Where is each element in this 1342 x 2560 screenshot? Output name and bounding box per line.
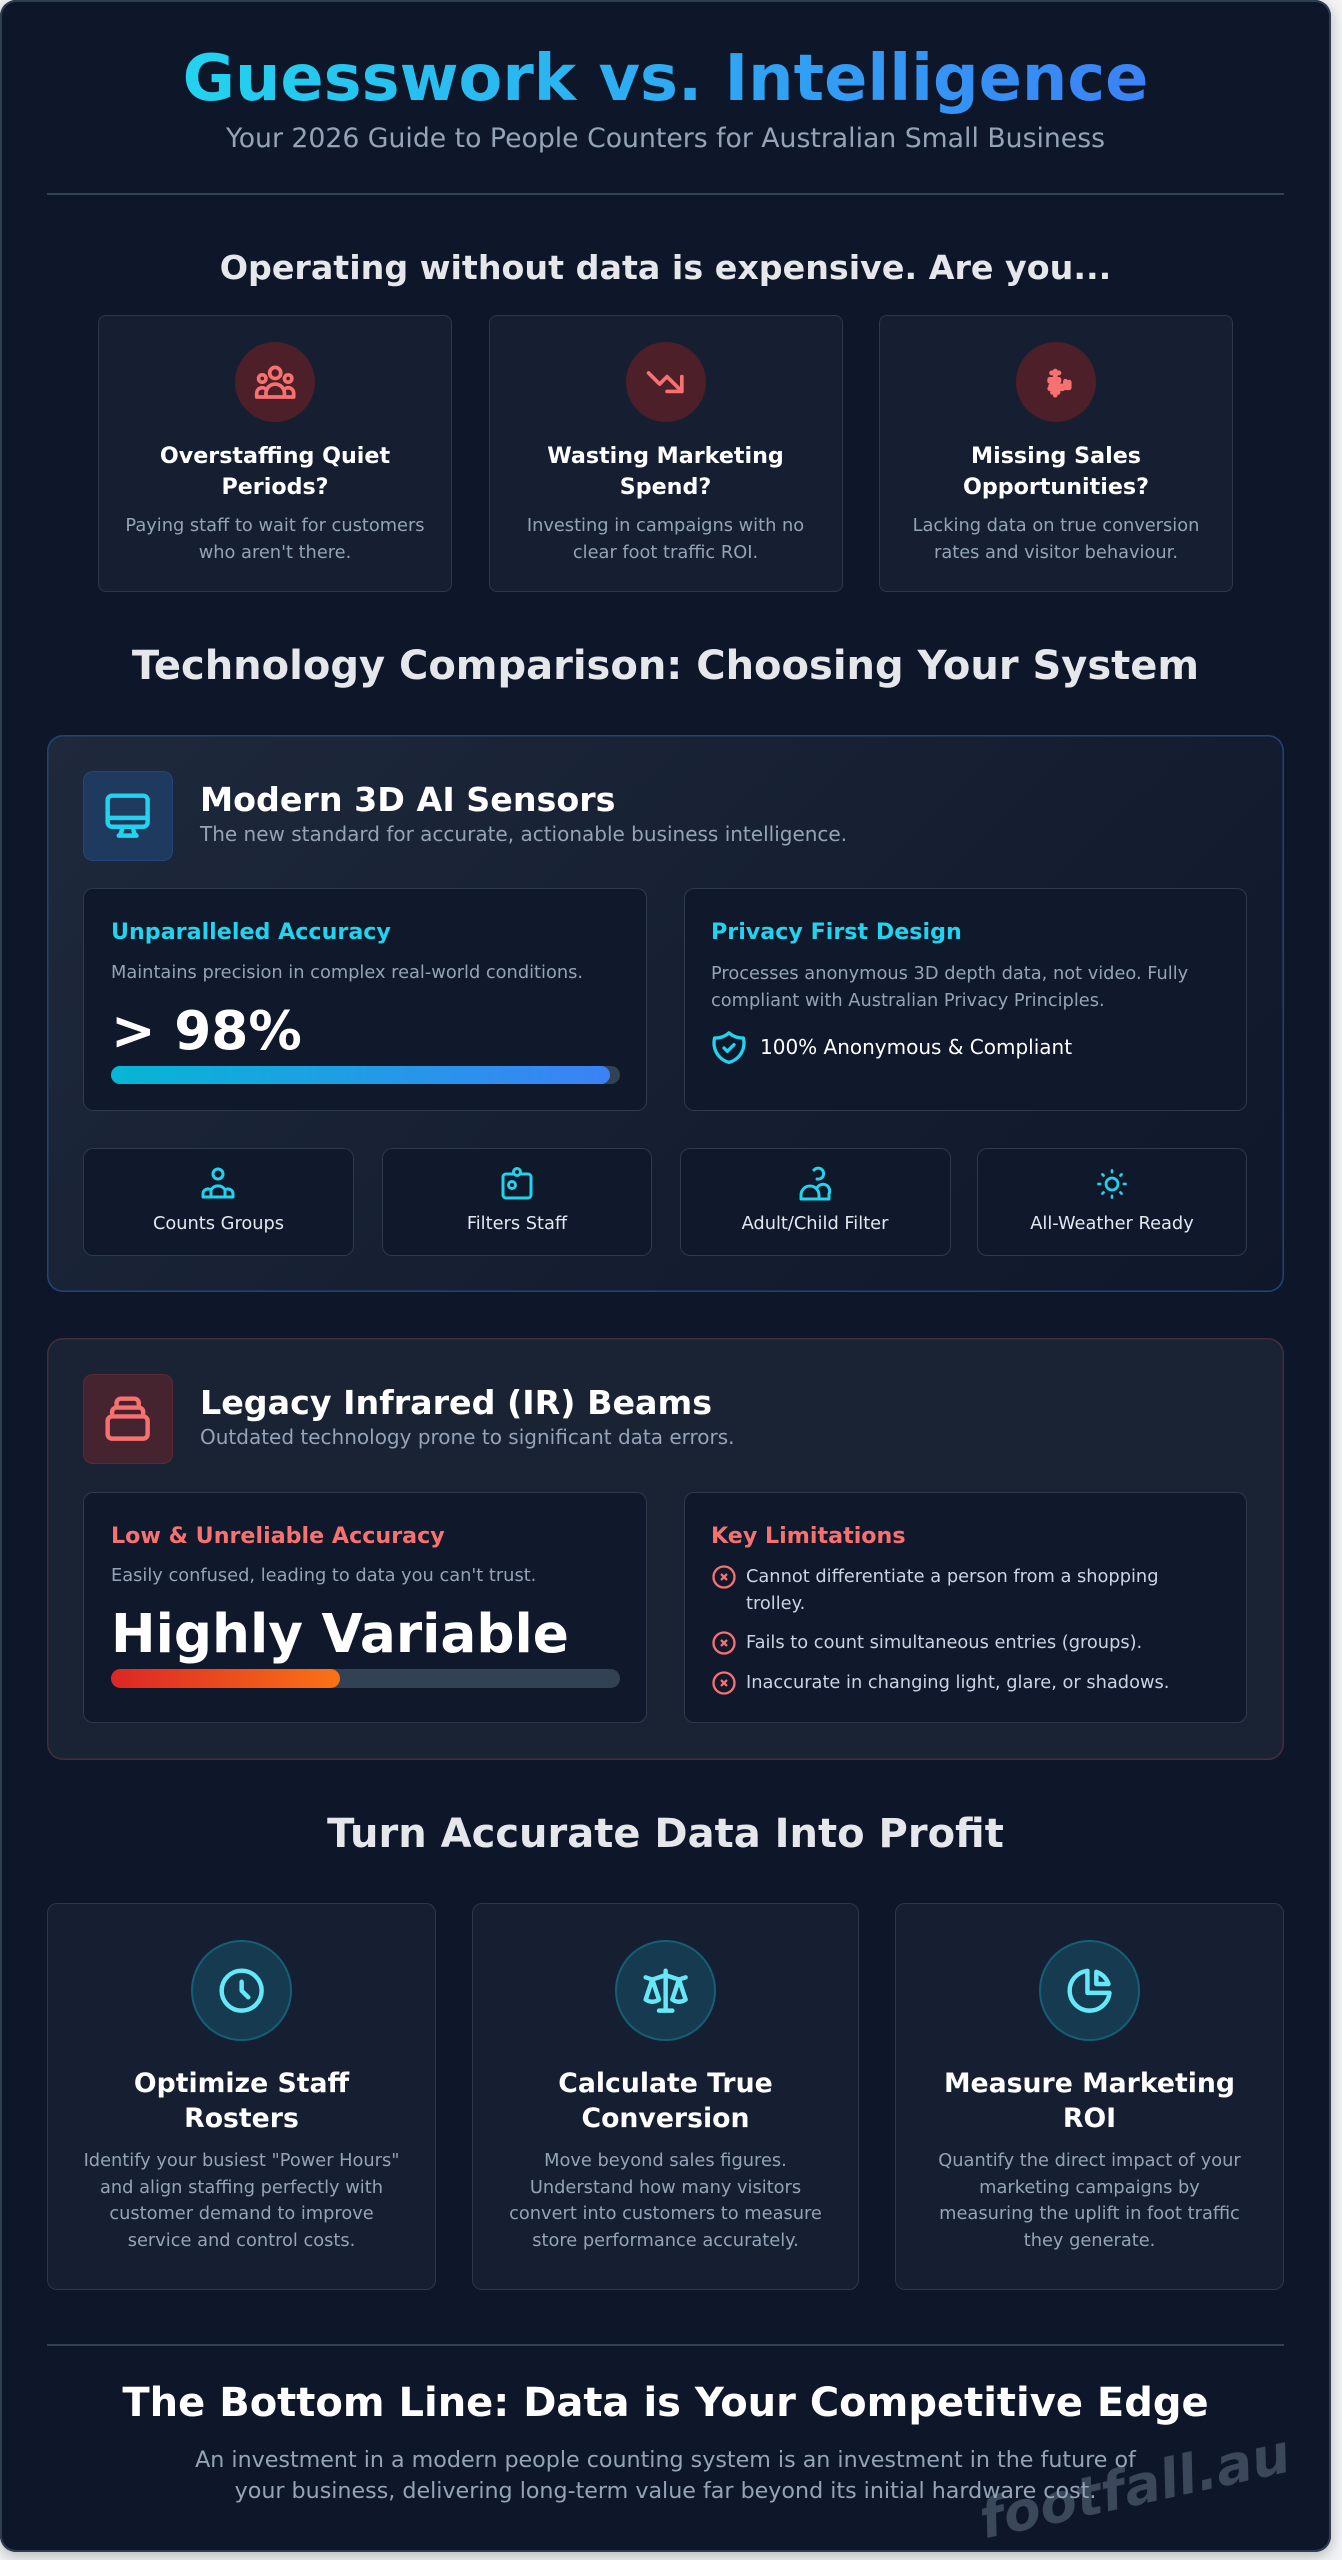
card text: they generate. [1024,2230,1155,2251]
card: privacy [684,888,1247,1111]
limitation 1: Cannot differentiate a person from a shopping [746,1566,1158,1587]
card text: Investing in campaigns with no [527,515,804,536]
card heading: Periods? [221,474,329,500]
card text: and align staffing perfectly with [100,2177,383,2198]
heading: Unparalleled Accuracy [111,919,391,945]
feature: all weather [977,1148,1247,1256]
card text: measuring the uplift in foot traffic [939,2203,1240,2224]
label: All-Weather Ready [1030,1213,1194,1234]
card text [938,2150,1241,2251]
panel subtitle: Outdated technology prone to significant data errors. [200,1425,735,1449]
icon: scale [615,1940,716,2041]
card heading [944,2068,1235,2134]
card heading: Calculate True [558,2068,773,2099]
title: Guesswork vs. Intelligence [183,42,1148,116]
card text: Identify your busiest "Power Hours" [84,2150,399,2171]
footer text: your business, delivering long-term value far beyond its initial hardware cost. [235,2478,1096,2504]
card: measure ROI [895,1903,1284,2290]
card: low accuracy [83,1492,647,1723]
limitation 1: trolley. [746,1593,805,1614]
panel subtitle: The new standard for accurate, actionable business intelligence. [200,822,847,846]
icon: pie chart [1039,1940,1140,2041]
panel: modern 3D AI sensors [47,735,1284,1292]
card text: Lacking data on true conversion [913,515,1199,536]
feature: filters staff [382,1148,652,1256]
label: Counts Groups [153,1213,284,1234]
icon: monitor [83,771,173,861]
panel title: Legacy Infrared (IR) Beams [200,1383,712,1422]
stat: Highly Variable [111,1603,569,1665]
footer heading: The Bottom Line: Data is Your Competitive Edge [122,2380,1209,2426]
card text: convert into customers to measure [509,2203,822,2224]
card heading: Conversion [582,2103,749,2134]
card text: service and control costs. [128,2230,355,2251]
heading: Key Limitations [711,1523,906,1549]
card heading [963,443,1149,500]
subtitle: Your 2026 Guide to People Counters for Australian Small Business [226,123,1105,154]
card heading: ROI [1063,2103,1116,2134]
card heading: Missing Sales [971,443,1141,469]
card text: Paying staff to wait for customers [125,515,425,536]
icon: trending down [626,342,706,422]
card text: marketing campaigns by [979,2177,1200,2198]
card text [509,2150,822,2251]
icon: shield [712,1031,746,1064]
text: Processes anonymous 3D depth data, not video. Fully [711,963,1188,984]
text: Maintains precision in complex real-world conditions. [111,962,583,983]
limitation 2: Fails to count simultaneous entries (groups). [746,1632,1142,1653]
text [711,963,1188,1011]
heading: Privacy First Design [711,919,962,945]
badge text: 100% Anonymous & Compliant [760,1035,1072,1059]
heading: technology comparison: Technology Comparison: Choosing Your System [132,643,1199,689]
icon: group [235,342,315,422]
limitation 1 [712,1565,1158,1614]
panel title: Modern 3D AI Sensors [200,780,616,819]
card text: store performance accurately. [532,2230,799,2251]
card heading: Rosters [184,2103,299,2134]
card text: rates and visitor behaviour. [934,542,1178,563]
card heading: Opportunities? [963,474,1149,500]
card: accuracy [83,888,647,1111]
card text: Understand how many visitors [530,2177,801,2198]
card text: who aren't there. [199,542,351,563]
card heading: Wasting Marketing [547,443,784,469]
card heading [558,2068,773,2134]
card heading [134,2068,350,2134]
card text [84,2150,399,2251]
card heading: Spend? [620,474,711,500]
label: Filters Staff [467,1213,567,1234]
icon [202,1168,234,1198]
footer text [195,2447,1136,2504]
card: key limitations [684,1492,1247,1723]
card heading [547,443,784,500]
card: missing sales [879,315,1233,592]
icon: dollar [1016,342,1096,422]
icon [502,1167,532,1200]
heading: Low & Unreliable Accuracy [111,1523,445,1549]
feature: adult/child [680,1148,950,1256]
icon: clock [191,1940,292,2041]
card: wasting marketing [488,315,842,592]
text: compliant with Australian Privacy Principles. [711,990,1105,1011]
heading: expensive: Operating without data is expensive. Are you... [220,248,1111,287]
card text: Move beyond sales figures. [544,2150,787,2171]
watermark: footfall.au [974,2422,1296,2551]
icon [800,1166,832,1200]
label: Adult/Child Filter [742,1213,888,1234]
text: Easily confused, leading to data you can't trust. [111,1565,536,1586]
card text [527,515,804,563]
card heading: Optimize Staff [134,2068,349,2099]
limitation 3: Inaccurate in changing light, glare, or shadows. [746,1672,1169,1693]
feature: counts groups [83,1148,354,1256]
card text: Quantify the direct impact of your [938,2150,1241,2171]
icon: collection [83,1374,173,1464]
footer text: An investment in a modern people counting system is an investment in the future of [195,2447,1136,2473]
card heading: Measure Marketing [944,2068,1235,2099]
icon [1097,1169,1127,1199]
card text [913,515,1199,563]
panel: legacy IR beams [47,1338,1284,1760]
card heading [160,443,390,500]
card: optimize staff rosters [47,1903,436,2290]
card: calculate conversion [472,1903,859,2290]
card heading: Overstaffing Quiet [160,443,390,469]
heading: turn data into profit: Turn Accurate Data Into Profit [327,1811,1004,1857]
card text: clear foot traffic ROI. [573,542,758,563]
card: overstaffing [98,315,452,592]
accuracy bar [111,1066,620,1084]
card text: customer demand to improve [109,2203,374,2224]
accuracy bar [111,1669,620,1688]
card text [125,515,425,563]
stat: > 98% [111,1000,302,1062]
